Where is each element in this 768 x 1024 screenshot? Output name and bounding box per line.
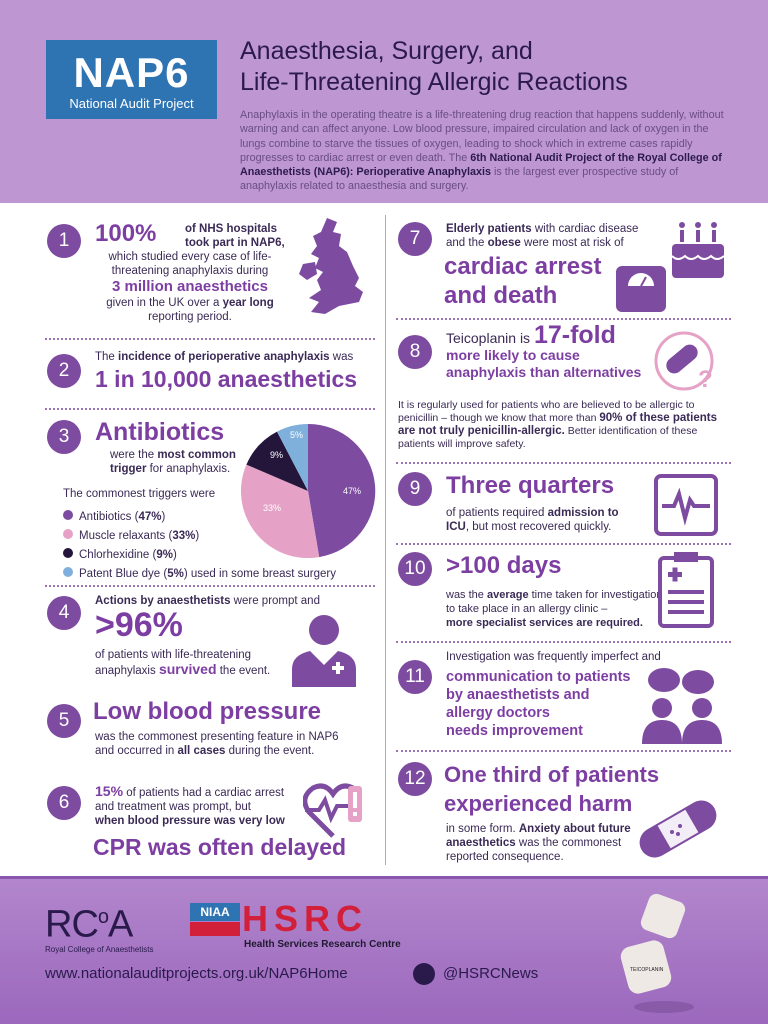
panel 10: >100 days [446,552,561,579]
panel 1: given in the UK over a year long reporting period. [106,297,274,323]
icon: pill [654,332,714,393]
panel 3: trigger for anaphylaxis. [110,463,230,475]
panel 4: Actions by anaesthetists were prompt and [95,595,320,607]
title: Anaesthesia, Surgery, and [240,37,533,65]
legend: Patent Blue dye (5%) used in some breast surgery [79,568,336,580]
panel 7 [398,222,724,312]
panel 12: 12 [404,768,426,789]
panel 9: 9 [410,478,420,499]
title: Life-Threatening Allergic Reactions [240,68,628,96]
NAP6 logo: NAP6 [73,49,190,96]
panel 10: was the average time taken for investigation [446,589,662,601]
panel 8: It is regularly used for patients who are believed to be allergic to penicillin – though we know that more than 90% of these patients are not truly penicillin-allergic. Better identification of these patients will improve safety. [398,399,717,450]
pie chart: 33% [263,503,281,513]
panel 2: The incidence of perioperative anaphylaxis was [95,351,353,363]
panel 5: Low blood pressure [93,698,321,725]
legend: Antibiotics (47%) [79,511,165,523]
icon: clipboard [658,552,714,628]
twitter [413,963,538,985]
panel 6: 6 [59,792,69,813]
NAP6 logo [46,40,217,119]
panel 3: were the most common [110,449,236,461]
icon: people talking [642,668,722,744]
HSRC logo [190,898,401,950]
panel 5: was the commonest presenting feature in NAP6 [95,731,339,743]
panel 12: reported consequence. [446,851,564,863]
panel 9: Three quarters [446,472,614,499]
panel 1: which studied every case of life-threatening anaphylaxis during [108,251,272,277]
icon: plaster [640,800,716,858]
panel 12: experienced harm [444,791,632,816]
panel 11: by anaesthetists and [446,687,589,703]
RCoA logo [45,904,154,954]
panel 4: anaphylaxis survived the event. [95,661,270,677]
panel 12: One third of patients [444,762,659,787]
panel 5: and occurred in all cases during the event. [95,745,314,757]
panel 4: >96% [95,606,183,644]
panel 10 [398,552,714,629]
panel 5: 5 [59,710,69,731]
header band [0,0,768,203]
panel 9 [398,472,718,536]
panel 6 [47,783,362,860]
panel 5 [47,698,339,757]
panel 3: Antibiotics [95,418,224,446]
panel 3 [47,418,376,580]
icon: pill: ? [698,366,713,393]
panel 9: ICU, but most recovered quickly. [446,521,611,533]
panel 8: Teicoplanin is 17-fold [446,321,616,349]
panel 6: 15% of patients had a cardiac arrest [95,783,284,799]
panel 2 [47,351,357,392]
panel 2: 2 [59,360,69,381]
panel 3: The commonest triggers were [63,488,215,500]
panel 4: 4 [59,602,69,623]
panel 11: needs improvement [446,723,583,739]
panel 1: 3 million anaesthetics [112,278,268,295]
intro text: Anaphylaxis in the operating theatre is a life-threatening drug reaction that happens suddenly, without warning and can affect anyone. Low blood pressure, impaired circulation and lack of oxygen in the lungs combine to starve the tissues of oxygen, leading to shock which in extreme cases rapidly progresses to cardiac arrest or even death. The 6th National Audit Project of the Royal College of Anaesthetists (NAP6): Perioperative Anaphylaxis is the largest ever prospective study of anaphylaxis related to anaesthesia and surgery. [240,109,724,192]
panel 1: 100% [95,220,156,247]
panel 3: 3 [59,426,69,447]
title [240,37,628,96]
panel 6: and treatment was prompt, but [95,801,251,813]
RCoA logo: RCoA [45,904,132,946]
pie chart: 5% [290,430,303,440]
legend: Chlorhexidine (9%) [79,549,177,561]
panel 11: communication to patients [446,669,630,685]
panel 10: more specialist services are required. [446,617,643,629]
panel 11: 11 [405,666,425,687]
pie chart: 9% [270,450,283,460]
legend: Muscle relaxants (33%) [79,530,199,542]
panel 1 [47,218,363,323]
HSRC logo: HSRC [242,898,368,939]
icon: ECG monitor [654,474,718,536]
NAP6 logo: National Audit Project [69,96,194,111]
column divider [385,215,386,865]
HSRC logo: NIAA [200,905,230,919]
panel 6: when blood pressure was very low [95,815,285,827]
panel 12 [398,762,716,863]
panel 4 [47,595,356,687]
twitter: @HSRCNews [443,965,538,982]
panel 10: 10 [404,558,426,579]
icon: doctor [292,615,356,687]
icon: scales [616,266,666,312]
panel 6: CPR was often delayed [93,834,346,860]
panel 8: more likely to cause [446,347,580,363]
website: www.nationalauditprojects.org.uk/NAP6Home [45,965,348,982]
panel 8: 8 [410,341,420,362]
panel 11 [398,651,722,744]
panel 1: 1 [59,230,69,251]
panel 1: of NHS hospitals [185,223,277,235]
panel 12: in some form. Anxiety about future [446,823,631,835]
RCoA logo: Royal College of Anaesthetists [45,945,154,954]
panel 12: anaesthetics was the commonest [446,837,621,849]
panel 7: cardiac arrest [444,253,601,280]
icon: birthday cake [672,222,724,278]
panel 9: of patients required admission to [446,507,619,519]
panel 10: to take place in an allergy clinic – [446,603,607,615]
pie chart: 47% [343,486,361,496]
icon: dice: TEICOPLANIN [630,967,664,973]
footer [0,876,768,1024]
panel 7: and death [444,282,557,309]
HSRC logo: Health Services Research Centre [244,939,401,950]
icon: dice [620,894,694,1013]
pie chart [241,424,376,558]
panel 7: and the obese were most at risk of [446,237,624,249]
panel 1: took part in NAP6, [185,237,285,249]
panel 8 [398,321,717,450]
icon: UK map [299,218,363,314]
panel 7: Elderly patients with cardiac disease [446,223,638,235]
panel 8: anaphylaxis than alternatives [446,364,641,380]
legend [63,510,336,580]
panel 4: of patients with life-threatening [95,649,251,661]
panel 11: Investigation was frequently imperfect and [446,651,661,663]
panel 7: 7 [410,228,420,249]
icon: heart monitor [303,783,362,838]
panel 2: 1 in 10,000 anaesthetics [95,366,357,392]
panel 11: allergy doctors [446,705,550,721]
